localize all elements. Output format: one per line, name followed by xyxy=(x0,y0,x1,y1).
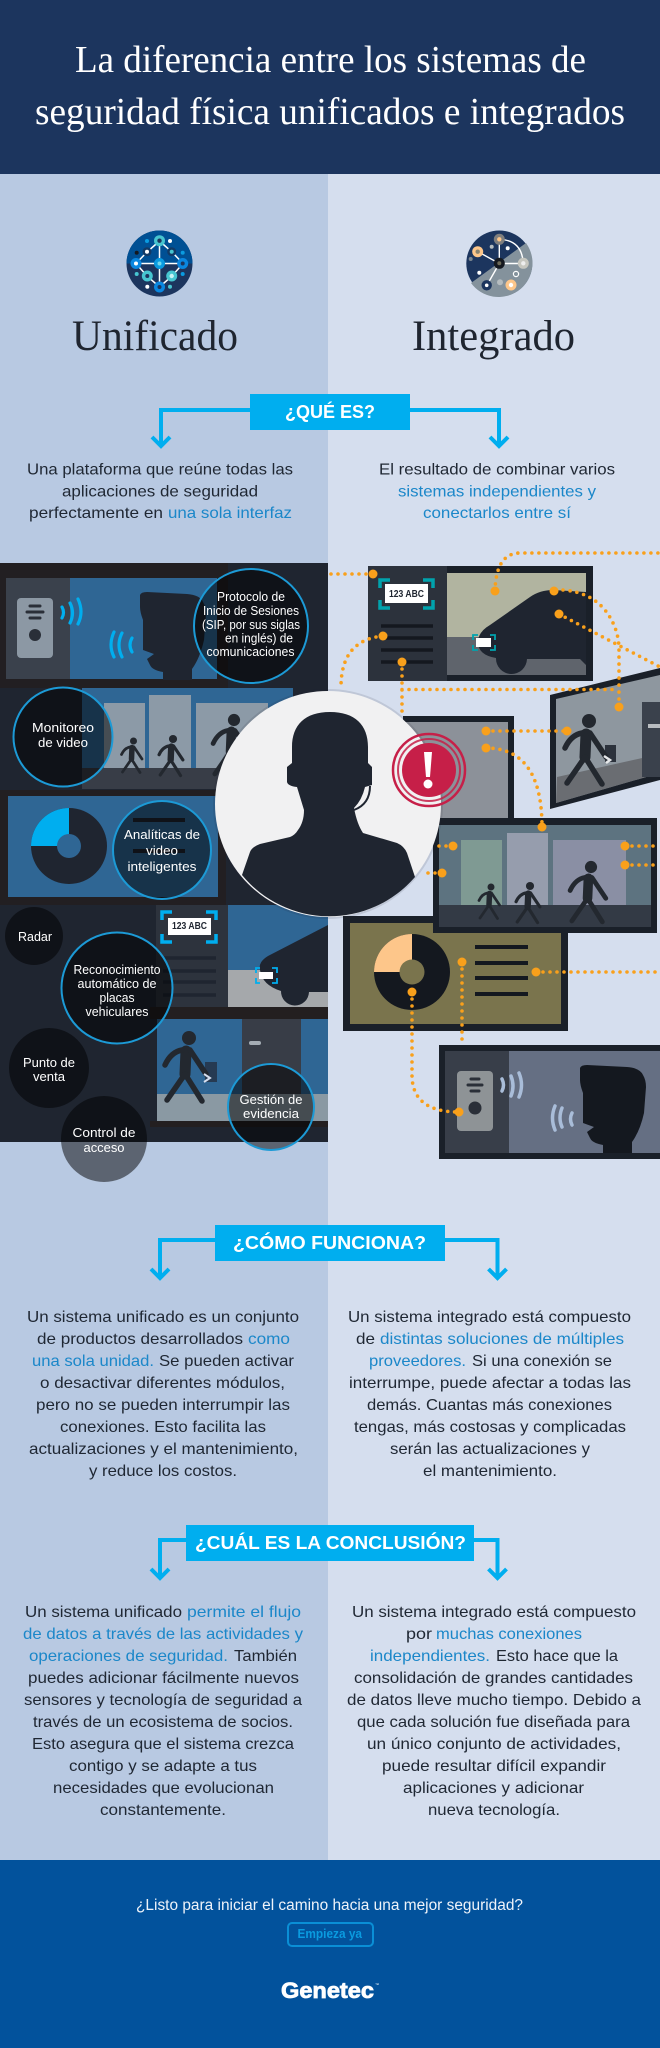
text: how integrated works: el mantenimiento. xyxy=(423,1463,557,1480)
text: how integrated works: Si una conexión se xyxy=(472,1353,612,1370)
label: conclusión: ¿CUÁL ES LA CONCLUSIÓN? xyxy=(195,1532,466,1553)
logo: Genetec: Genetec xyxy=(281,1978,374,2003)
panel: right column background xyxy=(328,174,660,1860)
callout: SIP: comunicaciones xyxy=(206,645,294,659)
callout: analytics xyxy=(113,801,211,899)
scene: intercom xyxy=(439,1045,660,1159)
callout: radar xyxy=(5,907,63,965)
label: cómo funciona xyxy=(215,1225,445,1261)
label: qué es: ¿QUÉ ES? xyxy=(285,401,375,422)
text: how unified works: conexiones. Esto facilita las xyxy=(60,1419,266,1436)
text: unified conclusion: través de un ecosistema de socios. xyxy=(33,1714,293,1731)
text: integrated conclusion: por xyxy=(406,1626,432,1643)
scene: pedestrian monitor xyxy=(433,818,657,933)
text: unified conclusion: operaciones de seguridad. xyxy=(29,1648,228,1665)
text: unified conclusion: sensores y tecnología de seguridad a xyxy=(24,1692,302,1709)
callout: license plates xyxy=(62,932,172,1044)
text: unified conclusion: Un sistema unificado xyxy=(25,1604,182,1621)
icon: alert xyxy=(393,734,465,806)
text: integrated conclusion: consolidación de grandes cantidades xyxy=(354,1670,633,1687)
text: unified conclusion xyxy=(23,1604,303,1819)
scene: access control xyxy=(157,1019,328,1121)
icon: integrated network xyxy=(466,230,533,297)
arrows: cómo funciona xyxy=(151,1240,506,1278)
label: qué es xyxy=(250,394,410,430)
callout: analytics: inteligentes xyxy=(128,860,196,874)
text: unified definition: aplicaciones de seguridad xyxy=(62,484,258,500)
text: how integrated works: de xyxy=(356,1331,375,1348)
callout: license plates: automático de xyxy=(78,977,157,991)
text: how unified works: actualizaciones y el mantenimiento, xyxy=(29,1441,298,1458)
text: integrated conclusion: que cada solución fue diseñada para xyxy=(357,1714,630,1731)
text: integrated conclusion xyxy=(347,1604,641,1819)
text: integrated definition: El resultado de combinar varios xyxy=(379,462,615,478)
text: integrated conclusion: un único conjunto de actividades, xyxy=(367,1736,621,1753)
text: how integrated works xyxy=(348,1309,631,1480)
callout: SIP: Protocolo de xyxy=(217,590,285,604)
button: empieza ya xyxy=(288,1923,373,1946)
scene: skewed access control xyxy=(550,668,660,809)
text: how unified works: como xyxy=(248,1331,290,1348)
callout: SIP: (SIP, por sus siglas xyxy=(202,618,300,632)
text: how integrated works: distintas soluciones de múltiples xyxy=(380,1331,624,1348)
icon: unified network xyxy=(126,230,192,296)
heading: Integrado: Integrado xyxy=(412,313,575,360)
text: how unified works: de productos desarrollados xyxy=(37,1331,243,1348)
callout: video monitoring: de video xyxy=(38,736,88,750)
callout: video monitoring xyxy=(14,688,112,786)
arrows: qué es xyxy=(152,410,508,446)
text: how unified works: pero no se pueden interrumpir las xyxy=(36,1397,290,1414)
callout: SIP: en inglés) de xyxy=(225,632,293,646)
text: how integrated works: demás. Cuantas más conexiones xyxy=(367,1397,612,1414)
scene: gray monitor xyxy=(403,716,514,819)
text: unified definition: perfectamente en xyxy=(29,505,163,522)
callout: evidence: evidencia xyxy=(243,1107,299,1121)
title: La diferencia entre los sistemas de xyxy=(75,39,586,81)
text: how unified works: y reduce los costos. xyxy=(89,1463,237,1480)
text: unified conclusion: necesidades que evolucionan xyxy=(53,1780,274,1797)
arrows: conclusión xyxy=(151,1540,506,1578)
scene: plate reader: 123 ABC xyxy=(389,589,424,600)
text: unified conclusion: de datos a través de las actividades y xyxy=(23,1626,303,1643)
callout: license plates: placas xyxy=(100,991,134,1005)
title: seguridad física unificados e integrados xyxy=(35,91,625,133)
text: integrated conclusion: Esto hace que la xyxy=(496,1648,618,1665)
scene: license plate reader xyxy=(156,905,328,1007)
text: how unified works: o desactivar diferentes módulos, xyxy=(40,1375,285,1392)
text: how integrated works: tengas, más costosas y complicadas xyxy=(354,1419,626,1436)
connections: nodes xyxy=(368,570,630,1116)
text: integrated conclusion: de datos lleve mucho tiempo. Debido a xyxy=(347,1692,641,1709)
text: unified conclusion: permite el flujo xyxy=(187,1604,301,1621)
call to action text: ¿Listo para iniciar el camino hacia una mejor seguridad? xyxy=(136,1897,523,1914)
text: integrated conclusion: puede resultar difícil expandir xyxy=(382,1758,606,1775)
text: unified conclusion: Esto asegura que el sistema crezca xyxy=(32,1736,294,1753)
callout: SIP xyxy=(194,569,308,683)
panel: integrated illustration xyxy=(331,553,660,1159)
text: how unified works: Un sistema unificado es un conjunto xyxy=(27,1309,299,1326)
callout: analytics: Analíticas de xyxy=(124,828,200,842)
text: unified conclusion: constantemente. xyxy=(100,1802,226,1819)
callout: radar: Radar xyxy=(18,930,52,944)
text: unified conclusion: contigo y se adapte a tus xyxy=(69,1758,257,1775)
icon: operator silhouette xyxy=(213,689,443,919)
callout: access control: Control de xyxy=(72,1126,136,1140)
text: integrated conclusion: nueva tecnología. xyxy=(428,1802,560,1819)
text: integrated conclusion: aplicaciones y adicionar xyxy=(403,1780,584,1797)
text: how unified works: Se pueden activar xyxy=(159,1353,294,1370)
callout: video monitoring: Monitoreo xyxy=(32,721,94,735)
text: integrated conclusion: independientes. xyxy=(370,1648,490,1665)
logo: Genetec: ™ xyxy=(375,1982,379,1987)
text: how integrated works: serán las actualizaciones y xyxy=(390,1441,590,1458)
text: integrated definition: conectarlos entre sí xyxy=(423,505,572,522)
text: unified definition: una sola interfaz xyxy=(168,505,292,522)
text: how unified works xyxy=(27,1309,299,1480)
text: integrated definition xyxy=(379,462,615,522)
callout: evidence xyxy=(228,1064,314,1150)
callout: license plates: vehiculares xyxy=(86,1005,148,1019)
text: integrated definition: sistemas independientes y xyxy=(398,484,596,500)
label: cómo funciona: ¿CÓMO FUNCIONA? xyxy=(233,1232,426,1253)
text: how unified works: una sola unidad. xyxy=(32,1353,154,1370)
scene: video monitoring xyxy=(82,688,293,789)
label: conclusión xyxy=(186,1525,474,1561)
scene: license plate reader: 123 ABC xyxy=(172,921,207,932)
text: integrated conclusion: muchas conexiones xyxy=(436,1626,582,1643)
text: how integrated works: Un sistema integrado está compuesto xyxy=(348,1309,631,1326)
scene: intercom xyxy=(6,578,217,680)
callout: access control: acceso xyxy=(84,1141,125,1155)
callout: analytics: video xyxy=(146,844,178,858)
panel: footer xyxy=(0,1860,660,2048)
text: unified conclusion: puedes adicionar fácilmente nuevos xyxy=(28,1670,299,1687)
callout: point of sale: Punto de xyxy=(23,1056,75,1070)
text: integrated conclusion: Un sistema integrado está compuesto xyxy=(352,1604,636,1621)
scene: olive analytics xyxy=(343,916,568,1031)
scene: analytics xyxy=(8,796,218,897)
callout: evidence: Gestión de xyxy=(240,1093,303,1107)
text: how integrated works: interrumpe, puede afectar a todas las xyxy=(349,1375,631,1392)
scene: plate reader xyxy=(368,566,593,681)
text: unified definition: Una plataforma que reúne todas las xyxy=(27,462,293,478)
panel: unified illustration xyxy=(0,563,328,1182)
panel: header xyxy=(0,0,660,174)
callout: point of sale: venta xyxy=(33,1070,65,1084)
text: unified definition xyxy=(27,462,293,522)
callout: point of sale xyxy=(9,1028,89,1108)
title xyxy=(35,39,625,133)
text: how integrated works: proveedores. xyxy=(369,1353,466,1370)
connections: dotted lines xyxy=(331,553,660,1112)
text: unified conclusion: También xyxy=(234,1648,297,1665)
heading: Unificado: Unificado xyxy=(72,313,238,360)
callout: license plates: Reconocimiento xyxy=(74,963,161,977)
button: empieza ya: Empieza ya xyxy=(298,1927,363,1941)
panel: left column background xyxy=(0,174,328,1860)
callout: access control xyxy=(61,1096,147,1182)
callout: SIP: Inicio de Sesiones xyxy=(203,604,299,618)
